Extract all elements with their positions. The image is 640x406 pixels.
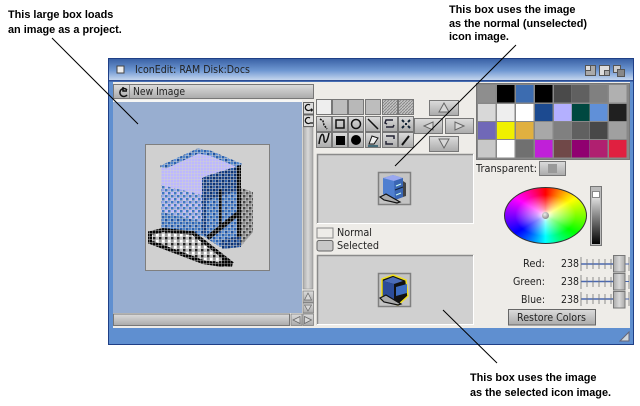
state legend: Selected	[337, 240, 379, 252]
annotation: normal image	[449, 4, 587, 43]
RGB sliders: 238	[561, 294, 579, 306]
icon: normal filing cabinet	[378, 172, 410, 204]
annotation: large box: an image as a project.	[8, 24, 122, 36]
annotation: large box	[8, 9, 122, 36]
arrow buttons	[414, 100, 474, 152]
selected image box	[317, 255, 474, 325]
RGB sliders: 238	[561, 258, 579, 270]
annotation: normal image: icon image.	[449, 31, 509, 43]
icon: selected filing cabinet	[378, 274, 410, 306]
window frame	[108, 58, 634, 345]
transparent control	[475, 162, 566, 176]
arrow: selected image	[443, 310, 497, 363]
arrow: normal image	[395, 45, 516, 166]
annotation: selected image: as the selected icon image.	[470, 387, 611, 399]
state legend	[317, 227, 379, 252]
horizontal scrollbar	[114, 314, 314, 326]
window content background	[113, 82, 630, 328]
annotation: selected image	[470, 372, 611, 399]
annotation: normal image: This box uses the image	[449, 4, 576, 16]
vertical scrollbar	[303, 102, 314, 313]
annotation: normal image: as the normal (unselected)	[449, 18, 587, 30]
RGB sliders: Red:	[523, 258, 545, 270]
RGB sliders: Green:	[513, 276, 545, 288]
image canvas	[113, 101, 302, 313]
normal image box	[317, 154, 474, 224]
restore colors button: Restore Colors	[517, 312, 586, 324]
color palette	[476, 84, 630, 160]
arrow: large box	[52, 38, 138, 124]
annotation: large box: This large box loads	[8, 9, 113, 21]
RGB sliders: 238	[561, 276, 579, 288]
color wheel	[504, 187, 587, 244]
state legend: Normal	[337, 227, 372, 239]
restore colors button	[508, 310, 596, 325]
annotation: selected image: This box uses the image	[470, 372, 596, 384]
transparent control: Transparent:	[475, 163, 537, 175]
icon: filing cabinet enlarged	[161, 150, 241, 249]
brightness slider	[590, 186, 602, 246]
New Image toolbar	[114, 84, 314, 98]
resize gadget	[620, 332, 629, 341]
RGB sliders: Blue:	[521, 294, 545, 306]
icon: paper sheets	[150, 230, 233, 267]
large icon box	[146, 144, 270, 270]
RGB sliders	[513, 256, 629, 308]
title bar: IconEdit: RAM Disk:Docs	[135, 64, 250, 76]
title bar	[109, 59, 633, 82]
New Image toolbar: New Image	[133, 86, 185, 98]
icon: shadow	[241, 188, 253, 246]
drawing tools palette	[316, 100, 414, 148]
